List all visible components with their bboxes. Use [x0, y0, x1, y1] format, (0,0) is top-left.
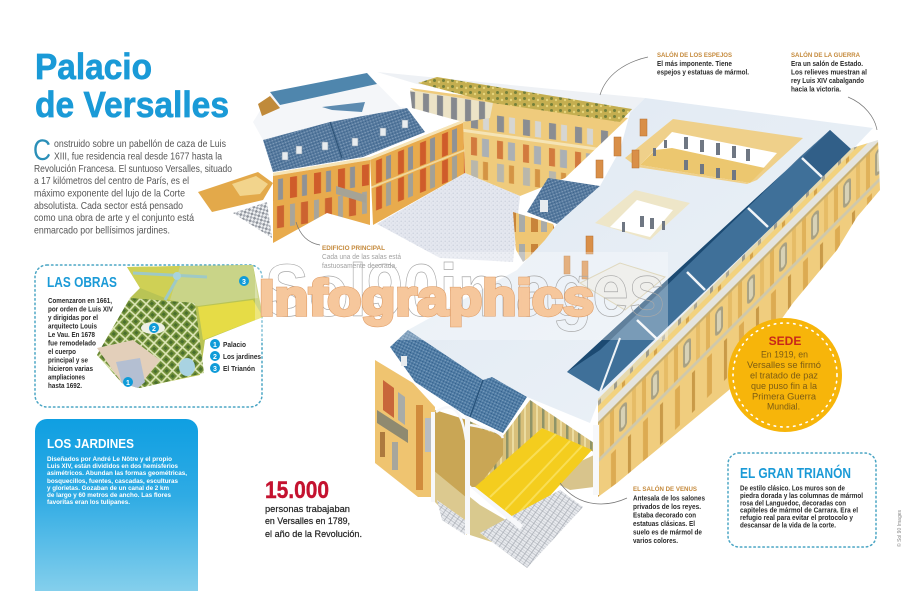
- back wing facade: [377, 72, 645, 196]
- map legend: [210, 339, 261, 373]
- main white roof of the right wing: [408, 98, 873, 423]
- intro paragraph: máximo exponente del lujo de la Corte: [34, 188, 185, 200]
- panel: el gran trianon: descansar de la vida de la corte.: [740, 522, 836, 530]
- statistic: 15.000 workers: el año de la Revolución.: [265, 529, 362, 540]
- callout: salon de la guerra: hacia la victoria.: [791, 86, 841, 94]
- las obras text: arquitecto Louis: [48, 324, 97, 330]
- badge: sede: el tratado de paz: [750, 370, 818, 382]
- intro paragraph: a 17 kilómetros del centro de París, es el: [34, 176, 189, 187]
- callout: edificio principal: [296, 222, 401, 270]
- callout: edificio principal: EDIFICIO PRINCIPAL: [322, 245, 385, 252]
- map legend: Palacio: [223, 342, 246, 349]
- los jardines text: y glorietas. Gozaban de un canal de 2 km: [47, 485, 169, 492]
- chimneys: [564, 119, 647, 279]
- title: Palacio: [35, 46, 152, 87]
- callout: edificio principal: Cada una de las salas está: [322, 254, 401, 261]
- los jardines text: [47, 456, 187, 506]
- panel: el gran trianon: capiteles de mármol de Carrara. Era el: [740, 508, 858, 514]
- callout: salon de la guerra: [791, 50, 877, 130]
- inner courtyard two: [595, 190, 690, 240]
- callout: el salon de venus: suelo es de mármol de: [633, 530, 702, 536]
- panel: el gran trianon: De estilo clásico. Los muros son de: [740, 486, 845, 492]
- right wing long facade: [598, 140, 880, 497]
- las obras text: [48, 298, 113, 390]
- los jardines text: asimétricos. Abundan las formas geométricas,: [47, 470, 187, 477]
- badge: sede: Primera Guerra: [752, 392, 817, 402]
- statistic: 15.000 workers: en Versalles en 1789,: [265, 516, 350, 527]
- map marker 2: 2: [152, 326, 156, 333]
- image credit: © Sol 90 Images: [896, 510, 903, 547]
- statistic: 15.000 workers: 15.000: [265, 477, 329, 504]
- callout: el salon de venus: estatuas clásicas. El: [633, 521, 695, 528]
- panel: el gran trianon: piedra dorada y las columnas de mármol: [740, 493, 863, 500]
- callout: el salon de venus: privados de los reyes.: [633, 504, 701, 511]
- callout: el salon de venus: Antesala de los salones: [633, 496, 705, 502]
- map legend: 2: [213, 354, 217, 361]
- callout: salon de los espejos: El más imponente. Tiene: [657, 61, 732, 68]
- las obras text: principal y se: [48, 358, 88, 364]
- front pavilion slate roof: [390, 330, 527, 433]
- map legend: 3: [213, 366, 217, 373]
- las obras text: Le Vau. En 1678: [48, 332, 95, 339]
- los jardines heading: LOS JARDINES: [47, 436, 134, 451]
- las obras text: hasta 1692.: [48, 383, 82, 390]
- map legend: Los jardines: [223, 354, 261, 361]
- las obras text: Comenzaron en 1661,: [48, 298, 112, 305]
- watermark: Sol90images: [265, 249, 665, 332]
- los jardines text: bosquecillos, fuentes, cascadas, esculturas: [47, 478, 178, 485]
- front left pavilion: [375, 330, 599, 568]
- badge: sede: SEDE: [769, 334, 801, 348]
- left wing facade: [273, 120, 465, 243]
- front pavilion facade: [375, 360, 435, 497]
- front small pavilion: [513, 178, 600, 262]
- los jardines text: Diseñados por André Le Nôtre y el propio: [47, 456, 172, 463]
- map legend: El Trianón: [223, 366, 255, 373]
- badge: sede: [728, 318, 842, 432]
- callout: el salon de venus: varios colores.: [633, 538, 678, 545]
- callout: el salon de venus: EL SALÓN DE VENUS: [633, 484, 697, 493]
- callout: salon de los espejos: SALÓN DE LOS ESPEJOS: [657, 50, 732, 59]
- callout: el salon de venus: [560, 483, 705, 545]
- callout: salon de la guerra: SALÓN DE LA GUERRA: [791, 50, 860, 59]
- map marker 1: 1: [126, 380, 130, 387]
- panel: los jardines: [35, 419, 198, 591]
- intro paragraph: [33, 134, 232, 236]
- intro paragraph: onstruido sobre un pabellón de caza de Luis: [54, 139, 226, 150]
- callout: salon de los espejos: espejos y estatuas de mármol.: [657, 70, 749, 76]
- cutaway room walls: [433, 410, 467, 500]
- right wing blue mansard roof: [567, 130, 852, 392]
- callout: salon de la guerra: rey Luis XIV cabalgando: [791, 78, 864, 85]
- las obras text: fue remodelado: [48, 340, 96, 348]
- las obras text: por orden de Luis XIV: [48, 306, 113, 314]
- white structural pillars: [431, 412, 599, 534]
- map marker 3: 3: [242, 279, 246, 286]
- panel: el gran trianon: [728, 453, 876, 547]
- intro paragraph: como una obra de arte y el conjunto está: [34, 213, 194, 224]
- panel: el gran trianon: refugio real para evitar el protocolo y: [740, 515, 853, 522]
- left pavilion roof: [253, 73, 425, 172]
- las obras heading: LAS OBRAS: [47, 275, 117, 291]
- callout: salon de la guerra: Era un salón de Estado.: [791, 61, 863, 68]
- panel: el gran trianon: EL GRAN TRIANÓN: [740, 464, 851, 482]
- panel: el gran trianon: rosa del Languedoc, decoradas con: [740, 500, 846, 508]
- las obras text: hicieron varias: [48, 366, 93, 373]
- intro paragraph: Revolución Francesa. El suntuoso Versalles, situado: [34, 164, 232, 175]
- inner courtyard one: [625, 119, 803, 184]
- las obras text: ampliaciones: [48, 374, 85, 382]
- intro paragraph: absolutista. Cada sector está pensado: [34, 201, 183, 212]
- watermark: Infographics: [259, 270, 594, 326]
- callout: salon de los espejos: [600, 50, 749, 95]
- las obras text: el cuerpo: [48, 349, 76, 356]
- title: [35, 46, 229, 125]
- yellow floor of the Salon de Venus: [475, 428, 592, 525]
- intro paragraph: enmarcado por bellísimos jardines.: [34, 226, 170, 236]
- panel: las obras: [35, 265, 263, 407]
- map legend: 1: [213, 342, 217, 349]
- las obras text: y dirigidas por el: [48, 315, 98, 322]
- drop cap: C: [33, 134, 51, 167]
- watermark: Infographics: [259, 270, 594, 326]
- statistic: 15.000 workers: personas trabajaban: [265, 504, 350, 515]
- title: de Versalles: [35, 84, 229, 125]
- map marker 1: [123, 377, 133, 387]
- los jardines text: de largo y 60 metros de ancho. Las flores: [47, 492, 171, 499]
- map marker 2: [149, 323, 159, 333]
- cour de marbre courtyard: [377, 173, 520, 262]
- left terrace with gilded roof: [198, 172, 273, 238]
- badge: sede: Mundial.: [767, 402, 800, 412]
- lower marble floor: [480, 490, 583, 568]
- callout: edificio principal: fastuosamente decorada.: [322, 263, 397, 270]
- inner courtyard three: [580, 263, 665, 310]
- badge: sede: que puso fin a la: [751, 381, 818, 392]
- callout: salon de la guerra: Los relieves muestran al: [791, 70, 867, 76]
- map marker 3: [239, 276, 249, 286]
- map of the gardens: [97, 265, 263, 388]
- badge: sede: En 1919, en: [761, 350, 808, 360]
- statistic: 15.000 workers: [265, 477, 362, 540]
- callout: el salon de venus: Estaba decorado con: [633, 512, 696, 520]
- los jardines text: favoritas eran los tulipanes.: [47, 499, 130, 506]
- los jardines text: Luis XIV, están divididos en dos hemisferios: [47, 463, 178, 470]
- badge: sede: Versalles se firmó: [747, 360, 821, 371]
- illustration: cutaway of the palace: [198, 72, 880, 568]
- intro paragraph: XIII, fue residencia real desde 1677 hasta la: [54, 152, 222, 162]
